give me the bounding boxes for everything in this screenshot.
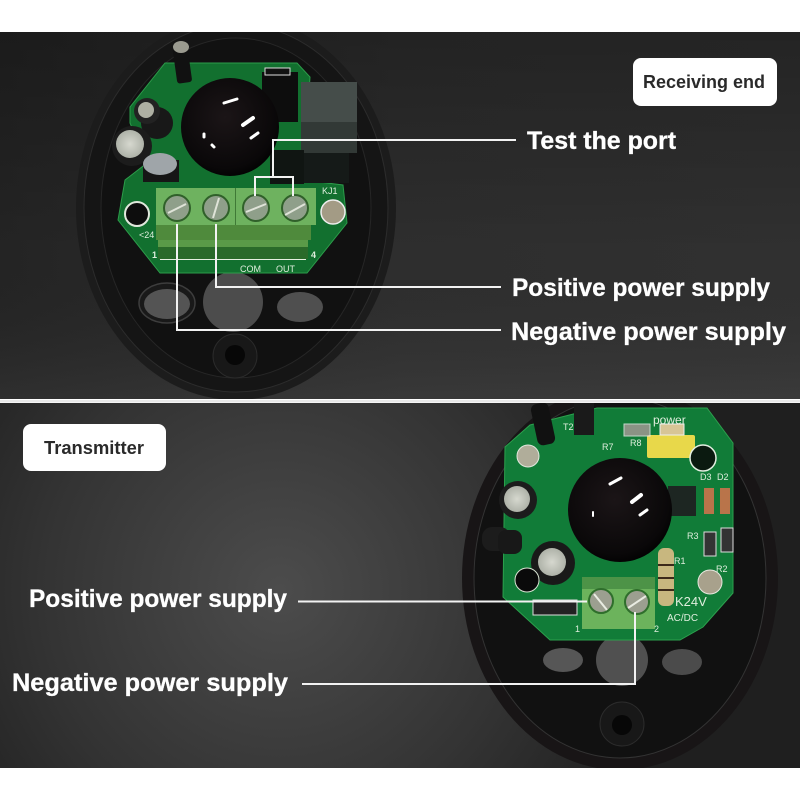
- photo: receiving end sensor: [76, 16, 396, 400]
- label: receiving end: Receiving end: [643, 72, 765, 92]
- callout: receiver negative power supply: Negative power supply: [511, 318, 786, 346]
- callout: receiver positive power supply: Positive power supply: [512, 274, 770, 302]
- label: transmitter: Transmitter: [44, 438, 144, 458]
- callout: transmitter positive power supply: Positive power supply: [29, 585, 287, 613]
- board markings: 1: [575, 624, 580, 634]
- board markings: R8: [630, 438, 642, 448]
- board markings: D3: [700, 472, 712, 482]
- terminal block: [125, 186, 345, 274]
- board markings: power: [653, 413, 686, 427]
- board markings: [563, 413, 729, 634]
- board markings: R2: [716, 564, 728, 574]
- board markings: R3: [687, 531, 699, 541]
- label: transmitter: [23, 424, 166, 471]
- board markings: R7: [602, 442, 614, 452]
- terminal block: COM: [240, 264, 261, 274]
- mounting holes: [543, 634, 702, 746]
- dark components: [112, 41, 357, 184]
- electronic components: [482, 402, 733, 615]
- terminal block: OUT: [276, 264, 296, 274]
- infrared dome: [568, 458, 672, 562]
- board markings: 2: [654, 624, 659, 634]
- panel: transmitter background: [0, 403, 800, 768]
- divider: [0, 400, 800, 402]
- circuit board: [503, 408, 733, 640]
- infrared dome: [181, 78, 279, 176]
- terminal block: 1: [152, 250, 157, 260]
- mounting holes: [139, 272, 323, 378]
- terminal block: <24: [139, 230, 154, 240]
- terminal block: 4: [311, 250, 316, 260]
- terminal block: [582, 577, 655, 629]
- leader lines: receiving end: [177, 140, 516, 330]
- callout: test the port: Test the port: [527, 127, 677, 155]
- board markings: D2: [717, 472, 729, 482]
- photo: transmitter sensor: [462, 386, 778, 770]
- leader lines: transmitter: [298, 602, 635, 684]
- board markings: AC/DC: [667, 613, 698, 624]
- board markings: T2: [563, 422, 574, 432]
- board markings: K24V: [675, 594, 707, 609]
- label: receiving end: [633, 58, 777, 106]
- circuit board: [118, 63, 347, 273]
- board markings: R1: [674, 556, 686, 566]
- panel: receiving end background: [0, 32, 800, 399]
- callout: transmitter negative power supply: Negative power supply: [12, 669, 288, 697]
- terminal block: KJ1: [322, 186, 338, 196]
